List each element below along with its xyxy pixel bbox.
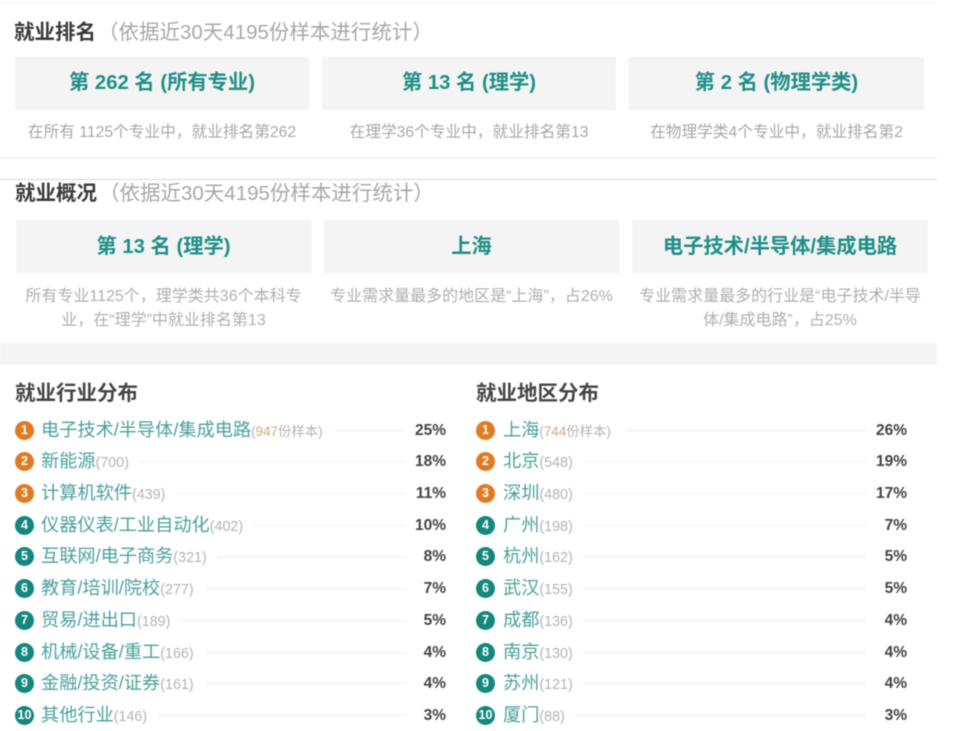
row 1 [14, 420, 446, 441]
panel: employment ranking [14, 20, 924, 141]
rank box: science: 第 13 名 (理学) [402, 72, 536, 94]
row 2: 18% [415, 453, 446, 470]
rank box: all majors [15, 57, 309, 110]
overview box: industry: 电子技术/半导体/集成电路 [663, 236, 897, 258]
row 2 [475, 450, 908, 472]
overview box: rank: 第 13 名 (理学) [96, 236, 231, 258]
heading: employment ranking: 就业排名（依据近30天4195份样本进行统计） [14, 21, 433, 44]
caption: science: 在理学36个专业中，就业排名第13 [350, 124, 588, 141]
row 6: 教育/培训/院校(277) [41, 578, 194, 598]
row 9 [475, 672, 908, 694]
caption: industry [639, 286, 921, 329]
row 5: 互联网/电子商务(321) [41, 546, 207, 566]
heading: industry distribution: 就业行业分布 [15, 382, 138, 405]
rank box: physics [629, 57, 924, 110]
row 4: 7% [885, 517, 907, 534]
row 4: 4 [482, 518, 489, 532]
overview box: region [324, 220, 619, 273]
row 5: 5 [482, 549, 489, 563]
row 9 [14, 672, 446, 694]
row 7: 7 [21, 613, 28, 627]
row 10: 10 [479, 708, 492, 722]
row 8: 4% [885, 644, 907, 661]
row 4: 广州(198) [503, 515, 573, 535]
row 6: 武汉(155) [503, 578, 573, 598]
heading: employment overview: 就业概况（依据近30天4195份样本进行统计） [15, 182, 434, 205]
row 6: 7% [424, 580, 446, 597]
row 10 [14, 704, 446, 726]
row 2: 2 [21, 454, 28, 468]
row 7: 4% [885, 612, 907, 629]
section divider [0, 179, 937, 180]
overview box: region: 上海 [451, 236, 492, 258]
row 10: 3% [424, 707, 446, 724]
row 8: 南京(130) [503, 642, 573, 662]
caption: physics: 在物理学类4个专业中，就业排名第2 [650, 124, 903, 141]
row 3: 3 [482, 486, 489, 500]
row 10: 10 [18, 708, 31, 722]
panel: industry distribution [14, 382, 446, 726]
caption: rank [25, 287, 302, 329]
row 4: 4 [21, 518, 28, 532]
row 8: 机械/设备/重工(166) [41, 642, 194, 662]
caption: all majors: 在所有 1125个专业中，就业排名第262 [28, 124, 296, 141]
row 8 [14, 642, 446, 663]
panel: region distribution [475, 382, 908, 726]
caption: industry: 专业需求量最多的行业是“电子技术/半导 [639, 288, 921, 305]
row 1 [475, 420, 908, 441]
row 3 [475, 483, 908, 504]
row 10: 厦门(88) [503, 705, 565, 725]
caption: industry: 体/集成电路”，占25% [703, 312, 857, 329]
rank box: science [322, 57, 616, 110]
row 4 [475, 514, 908, 536]
row 1: 上海(744份样本) [503, 420, 611, 440]
row 9: 9 [482, 676, 489, 690]
row 3: 11% [416, 485, 446, 502]
row 8: 8 [21, 645, 28, 659]
row 9: 金融/投资/证券(161) [41, 673, 194, 693]
row 4 [14, 514, 446, 536]
row 5: 5 [21, 549, 28, 563]
row 2: 北京(548) [503, 451, 573, 471]
caption: region: 专业需求量最多的地区是“上海”，占26% [330, 288, 613, 305]
row 1: 26% [876, 422, 907, 439]
row 7 [14, 610, 446, 631]
row 7: 5% [424, 612, 446, 629]
row 1: 25% [415, 422, 446, 439]
row 3 [14, 482, 446, 504]
row 9: 苏州(121) [503, 673, 573, 693]
row 1: 1 [482, 423, 489, 437]
overview box: rank [16, 220, 311, 273]
row 2: 19% [876, 453, 907, 470]
rank box: physics: 第 2 名 (物理学类) [695, 72, 858, 94]
row 5: 5% [885, 548, 907, 565]
row 3: 计算机软件(439) [41, 483, 165, 503]
row 8: 8 [482, 645, 489, 659]
row 9: 4% [885, 675, 907, 692]
row 2: 新能源(700) [41, 451, 129, 471]
section divider [0, 157, 937, 159]
row 5 [475, 546, 908, 567]
row 6: 6 [482, 581, 489, 595]
row 6: 6 [21, 581, 28, 595]
row 6 [14, 578, 446, 599]
row 5: 杭州(162) [503, 546, 573, 566]
row 5 [14, 546, 446, 567]
overview box: industry [632, 220, 928, 273]
caption: rank: 业，在“理学”中就业排名第13 [61, 312, 266, 329]
top divider [0, 3, 937, 4]
row 2: 2 [482, 454, 489, 468]
rank box: all majors: 第 262 名 (所有专业) [69, 72, 255, 94]
row 7: 成都(136) [503, 610, 573, 630]
row 4: 10% [415, 517, 446, 534]
row 4: 仪器仪表/工业自动化(402) [41, 515, 243, 535]
row 7 [475, 610, 908, 631]
row 7: 贸易/进出口(189) [41, 610, 170, 630]
row 1: 1 [21, 423, 28, 437]
row 3: 3 [21, 486, 28, 500]
panel: employment overview [15, 182, 928, 329]
row 6 [475, 578, 908, 599]
row 10: 其他行业(146) [41, 705, 147, 725]
row 8 [475, 642, 908, 663]
row 2 [14, 450, 446, 472]
row 10: 3% [885, 707, 907, 724]
row 5: 8% [424, 548, 446, 565]
row 3: 17% [876, 485, 907, 502]
heading: region distribution: 就业地区分布 [476, 382, 599, 405]
grey band [0, 343, 937, 365]
row 10 [475, 705, 908, 726]
row 8: 4% [424, 644, 446, 661]
caption: rank: 所有专业1125个，理学类共36个本科专 [25, 288, 302, 305]
row 9: 9 [21, 676, 28, 690]
row 6: 5% [885, 580, 907, 597]
row 1: 电子技术/半导体/集成电路(947份样本) [41, 420, 323, 440]
row 7: 7 [482, 613, 489, 627]
row 9: 4% [424, 675, 446, 692]
row 3: 深圳(480) [503, 483, 573, 503]
